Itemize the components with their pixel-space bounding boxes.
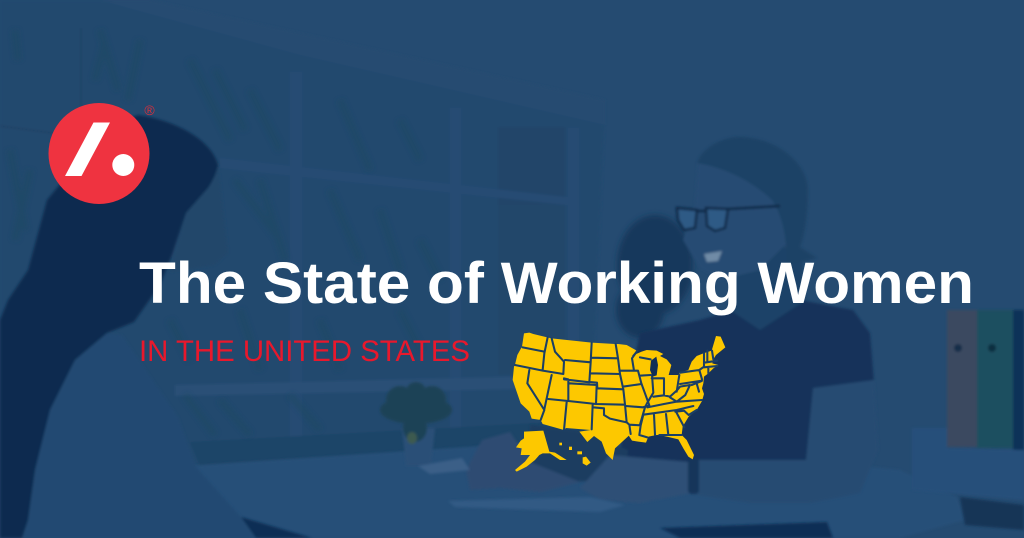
Lake Michigan bbox=[650, 357, 658, 377]
logo dot bbox=[112, 154, 134, 176]
registered mark: ® bbox=[144, 102, 155, 118]
binders on shelf bbox=[912, 310, 1024, 500]
contiguous states silhouette bbox=[513, 333, 725, 460]
plant behind woman bbox=[616, 215, 693, 338]
logo bbox=[48, 102, 155, 204]
left woman bbox=[0, 115, 312, 538]
state borders bbox=[515, 337, 717, 437]
window with foliage bbox=[0, 0, 605, 480]
logo slash bbox=[65, 122, 110, 176]
foreground desk bbox=[190, 438, 965, 538]
subtitle: IN THE UNITED STATES bbox=[139, 335, 470, 368]
title: The State of Working Women bbox=[139, 251, 974, 316]
Hawaii bbox=[559, 443, 591, 466]
desk shadows and paper bbox=[418, 458, 1024, 538]
potted plant bbox=[380, 382, 452, 466]
right woman bbox=[466, 137, 878, 503]
glasses bbox=[677, 206, 780, 231]
icon: map of the United States bbox=[513, 333, 725, 472]
foliage texture bbox=[10, 30, 440, 435]
logo circle bbox=[48, 103, 150, 204]
Alaska bbox=[515, 431, 567, 472]
